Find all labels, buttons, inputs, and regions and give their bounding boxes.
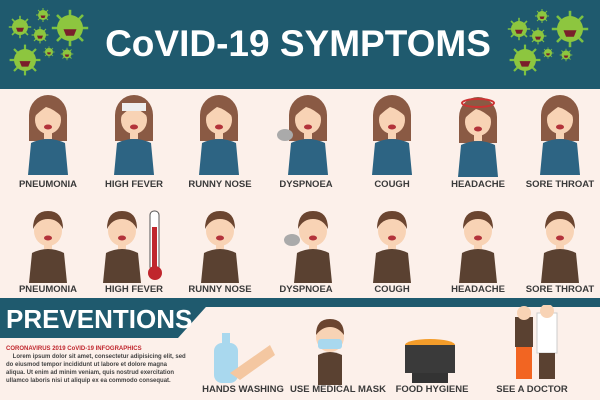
- viruses right: [508, 9, 588, 76]
- text: SORE THROAT: [526, 284, 594, 295]
- text: USE MEDICAL MASK: [290, 384, 386, 395]
- labels row 2: [19, 284, 594, 295]
- text: DYSPNOEA: [279, 179, 333, 190]
- viruses left: [8, 8, 88, 76]
- text: SORE THROAT: [526, 179, 594, 190]
- preventions heading: PREVENTIONS: [6, 304, 192, 334]
- text: HEADACHE: [451, 179, 505, 190]
- text block: CORONAVIRUS 2019 CoVID-19 INFOGRAPHICS: [6, 346, 142, 352]
- prevention labels: [202, 384, 568, 395]
- text: FOOD HYGIENE: [396, 384, 468, 395]
- text: COUGH: [374, 284, 410, 295]
- text block: Lorem ipsum dolor sit amet, consectetur adipisicing elit, sed do eiusmod tempor incididunt ut labore et dolore magna aliqua. Ut enim ad minim veniam, quis nostrud exercitation ullamco laboris nisi ut aliquip ex ea commodo consequat.: [6, 354, 186, 384]
- text: PNEUMONIA: [19, 179, 77, 190]
- title: CoVID-19 SYMPTOMS: [105, 23, 491, 64]
- text: HANDS WASHING: [202, 384, 284, 395]
- text: HIGH FEVER: [105, 284, 163, 295]
- prevention icons: [214, 305, 558, 385]
- text: SEE A DOCTOR: [496, 384, 568, 395]
- text: DYSPNOEA: [279, 284, 333, 295]
- labels row 1: [19, 179, 594, 190]
- text: RUNNY NOSE: [188, 284, 252, 295]
- text: COUGH: [374, 179, 410, 190]
- symptom figures row 1: [28, 95, 580, 177]
- text: HEADACHE: [451, 284, 505, 295]
- preventions banner: [0, 298, 600, 338]
- text: RUNNY NOSE: [188, 179, 252, 190]
- symptom figures row 2: [29, 210, 579, 283]
- text: HIGH FEVER: [105, 179, 163, 190]
- header banner: [0, 0, 600, 89]
- text: PNEUMONIA: [19, 284, 77, 295]
